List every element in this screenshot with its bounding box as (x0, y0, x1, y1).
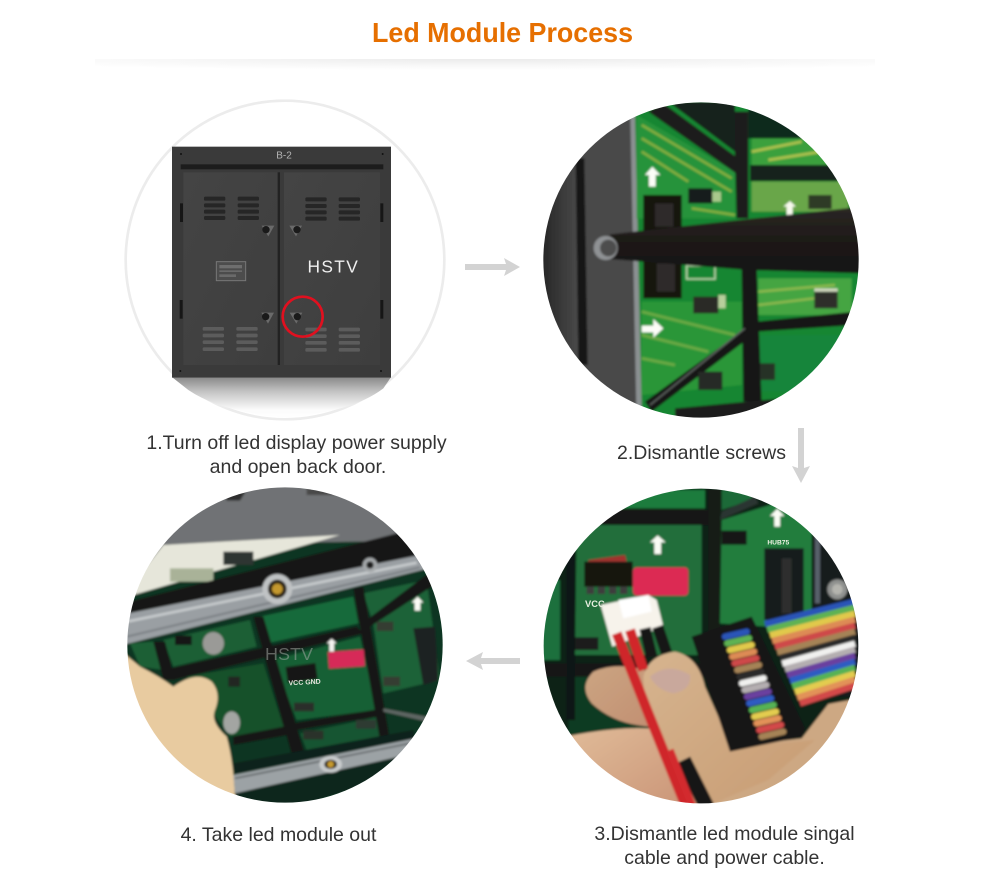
board text HUB75: HUB75 (767, 540, 789, 547)
watermark: HSTV (265, 644, 313, 664)
hub connector (764, 548, 804, 620)
caption: step 1: 1.Turn off led display power supply (146, 432, 447, 454)
red label (328, 649, 365, 669)
light traces (637, 115, 735, 218)
white arrows (650, 535, 666, 554)
driver rod (610, 207, 862, 273)
label plate (216, 262, 246, 281)
top vents (204, 197, 360, 221)
caption: step 4: 4. Take led module out (181, 824, 377, 846)
board text VCC: VCC (585, 599, 605, 609)
rainbow ribbon cable (765, 602, 855, 703)
hub connector (413, 627, 438, 685)
door locks (261, 226, 302, 324)
circular photo (543, 102, 859, 418)
white arrows (327, 639, 337, 652)
circular photo (544, 488, 858, 804)
caption: step 1: and open back door. (210, 456, 386, 478)
cabinet body (172, 147, 391, 378)
background panel (155, 487, 398, 556)
panel: step 1 back door photo (126, 101, 444, 419)
ring frame (126, 101, 444, 419)
silver rail (120, 555, 428, 646)
thumbnail (650, 669, 690, 693)
frame bars (708, 490, 720, 667)
module cells (615, 490, 705, 508)
red label (633, 567, 688, 596)
red cables (617, 633, 687, 808)
chips (722, 531, 747, 545)
board text: VCC GND (288, 679, 321, 687)
hand (128, 654, 237, 795)
lower hand (568, 728, 692, 813)
capacitors (203, 632, 224, 655)
power socket (584, 562, 633, 587)
chips (688, 188, 712, 203)
frame bars (163, 627, 363, 680)
brand text: HSTV (308, 257, 359, 277)
arrow: step 3 to 4 (466, 652, 520, 670)
green module cells (163, 620, 257, 667)
arrow: step 1 to 2 (465, 258, 520, 276)
cabinet code: B-2 (276, 151, 292, 162)
caption: step 3 (594, 823, 855, 869)
power connector (286, 663, 318, 683)
chips (175, 636, 192, 645)
lower silver rail (233, 738, 422, 793)
white arrows (645, 167, 660, 187)
cabinet edge and screw (812, 546, 858, 698)
lower gold screw (319, 756, 342, 773)
thumb (643, 652, 815, 808)
screw washer (594, 236, 618, 260)
white plug (601, 595, 663, 647)
cabinet side (543, 162, 580, 360)
panel: step 4 take module out photo (127, 487, 443, 803)
red highlight circle (283, 297, 323, 337)
black bar (120, 532, 420, 615)
caption: step 2: 2.Dismantle screws (617, 442, 786, 464)
circular photo (127, 487, 443, 803)
title: Led Module Process (372, 17, 633, 48)
finger (585, 666, 652, 727)
bottom vents (203, 327, 360, 352)
ribbon connector (692, 617, 805, 752)
caption: step 3: cable and power cable. (624, 847, 825, 869)
caption: step 3: 3.Dismantle led module singal (594, 823, 855, 845)
cable bundle bottom (683, 760, 710, 813)
frame bars (648, 106, 738, 174)
caption: step 1 (146, 432, 447, 478)
connector (643, 195, 682, 298)
panel: step 2 dismantle screws photo (543, 102, 859, 418)
panel: step 3 dismantle cables photo (544, 488, 858, 804)
gold screws (262, 574, 292, 604)
ribbon connector inner stripes (725, 632, 783, 737)
arrow: step 2 to 3 (792, 428, 810, 483)
faded watermark box (687, 266, 715, 279)
cabinet fade reflection (173, 378, 391, 418)
black cables (645, 627, 667, 657)
palm right and thumb base (695, 693, 868, 813)
title underline shadow (95, 59, 875, 75)
